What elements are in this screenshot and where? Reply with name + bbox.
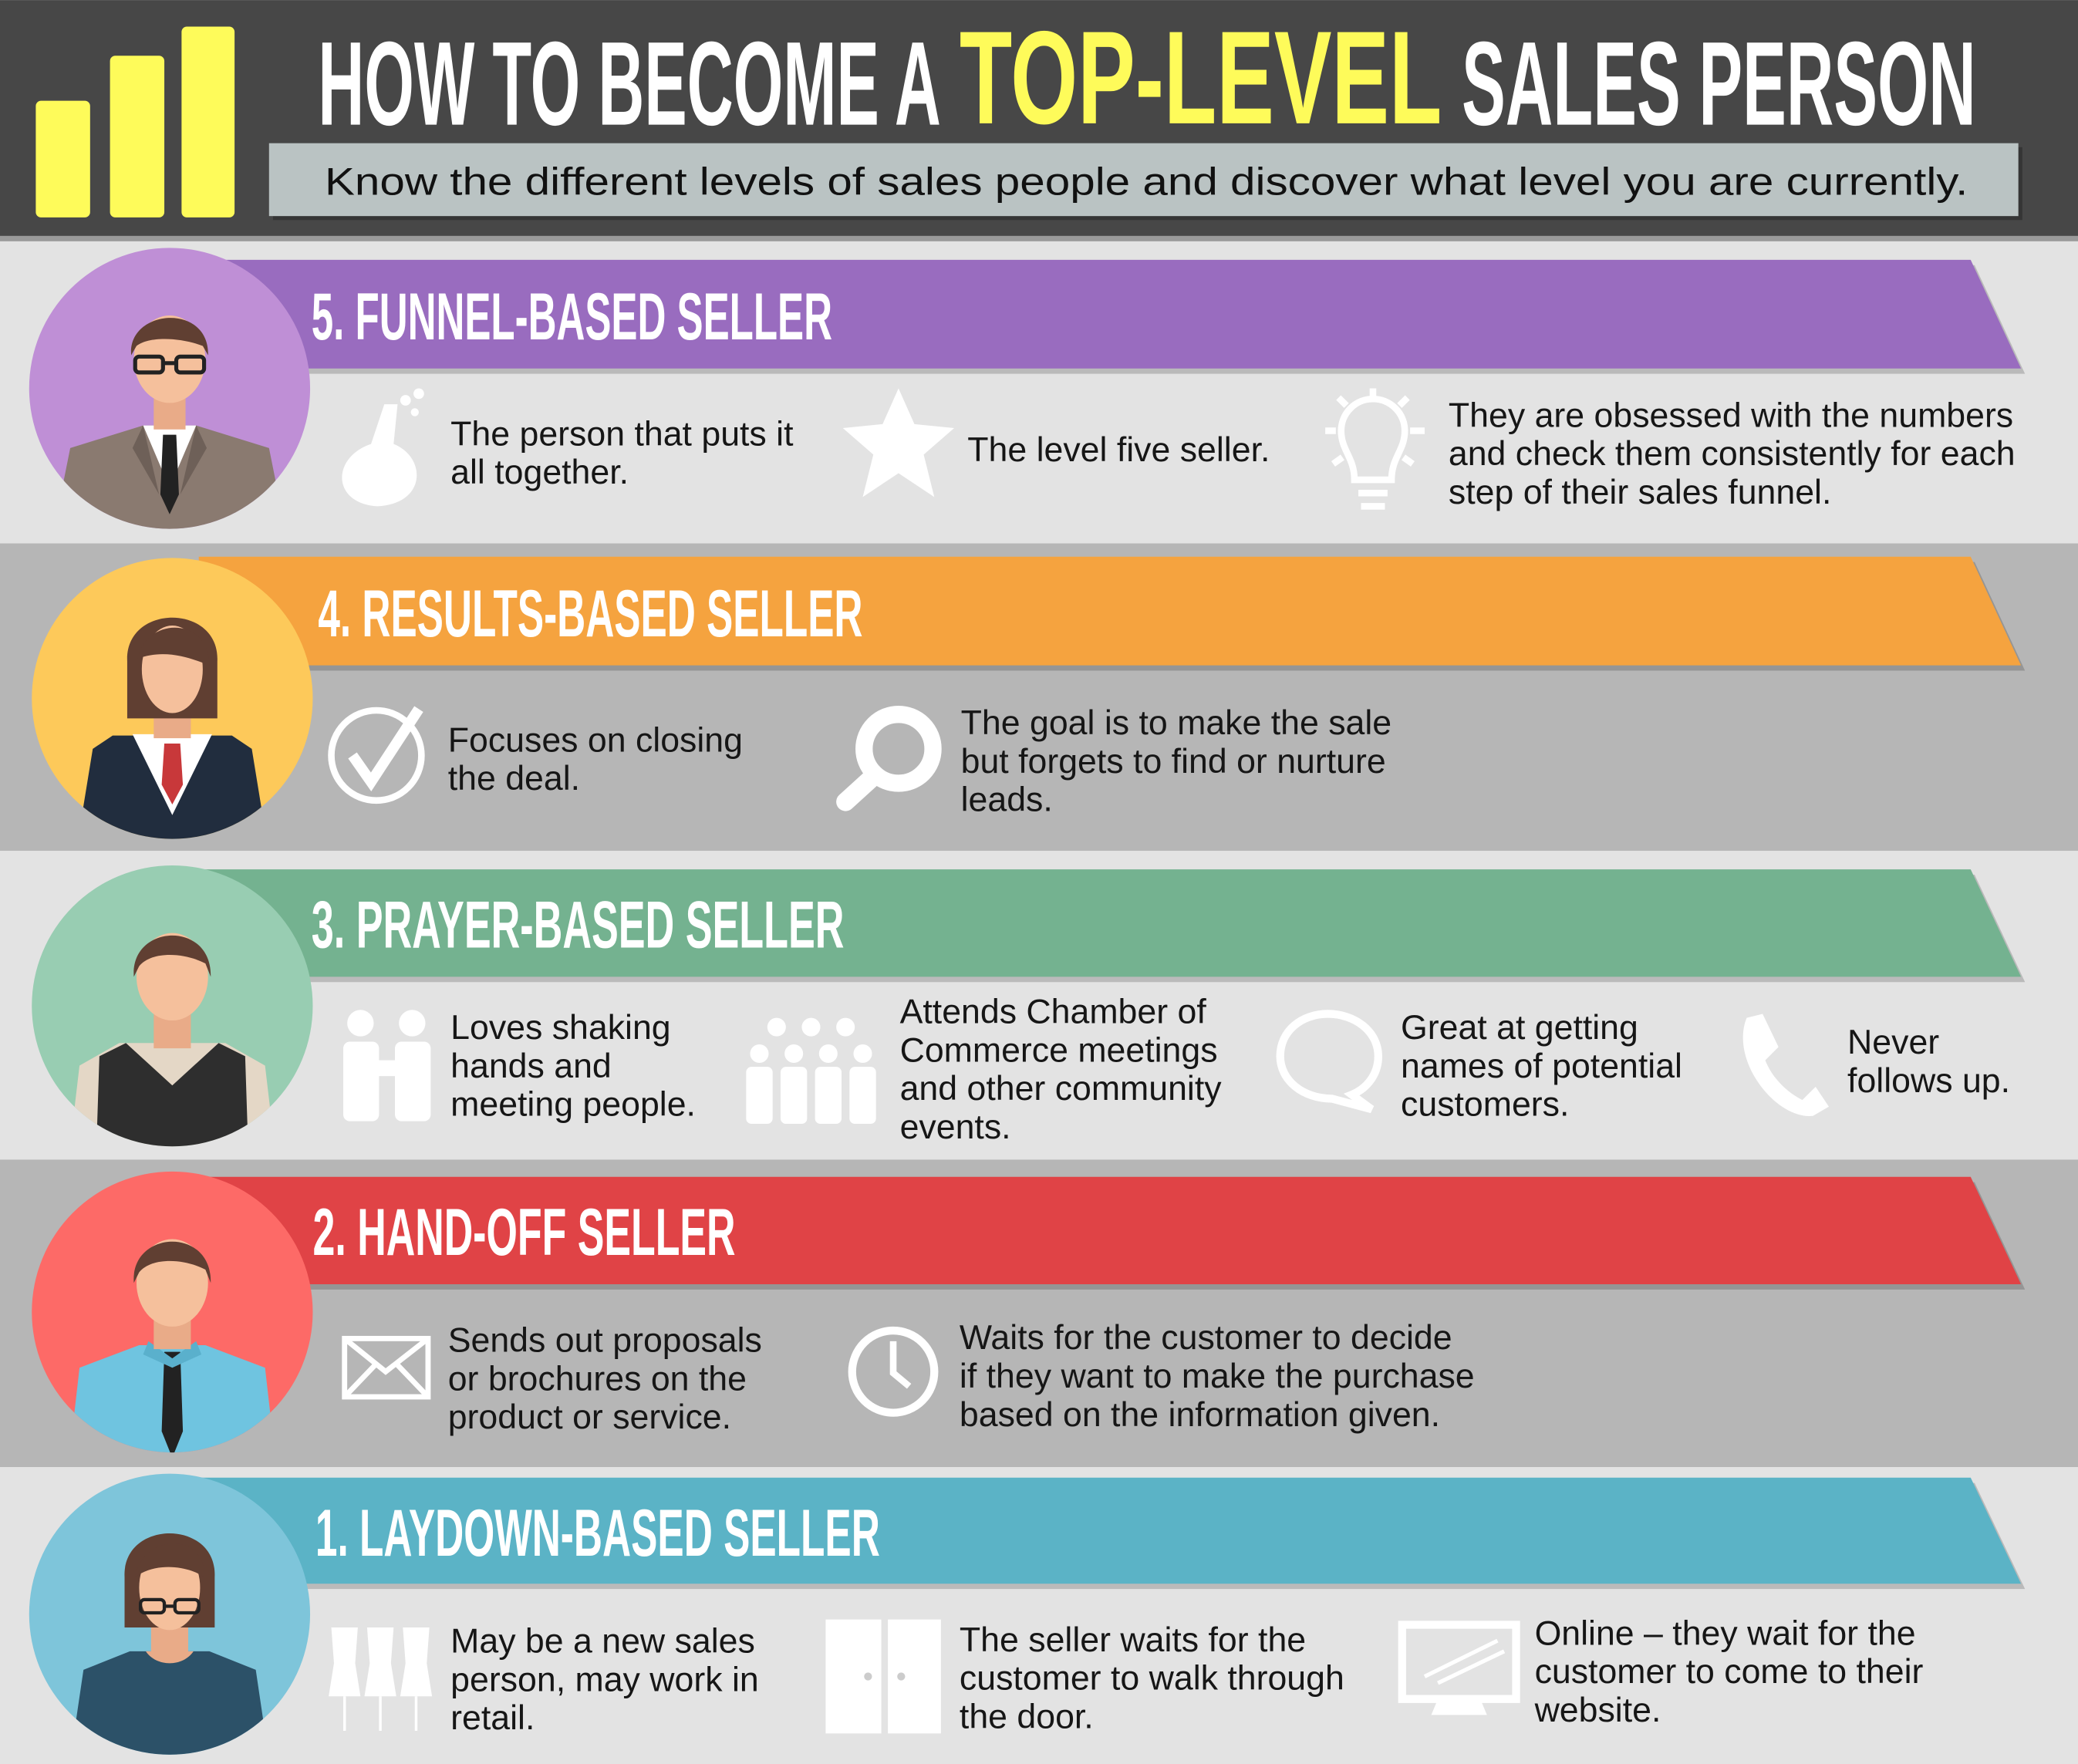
text 2a: or brochures on the (448, 1360, 747, 1398)
text 3d (1847, 1024, 2010, 1100)
text 1c: customer to come to their (1535, 1653, 1924, 1691)
text 5a: The person that puts it (450, 415, 794, 453)
banner 4 (199, 557, 2025, 670)
banner 4: 4. RESULTS-BASED SELLER (318, 577, 862, 651)
text 1c: website. (1534, 1691, 1661, 1729)
text 4a (448, 721, 743, 798)
avatar 3 (32, 865, 313, 1146)
text 2a: Sends out proposals (448, 1322, 762, 1360)
banner 2: 2. HAND-OFF SELLER (312, 1196, 736, 1270)
panel: level 3 (32, 865, 2026, 1146)
text 3b: Commerce meetings (900, 1031, 1218, 1069)
text 3b: and other community (900, 1070, 1222, 1108)
text 5c: They are obsessed with the numbers (1449, 396, 2013, 434)
text 3c: names of potential (1401, 1047, 1682, 1085)
title: TOP-LEVEL (960, 4, 1442, 152)
text 4b (961, 704, 1392, 819)
banner 3: 3. PRAYER-BASED SELLER (312, 889, 844, 963)
text 3a: Loves shaking (450, 1009, 671, 1047)
text 3d: follows up. (1847, 1062, 2010, 1100)
title (318, 4, 1976, 152)
text 1c: Online – they wait for the (1535, 1614, 1916, 1652)
banner 1: 1. LAYDOWN-BASED SELLER (315, 1496, 880, 1570)
banner 5 (199, 260, 2025, 374)
subtitle box: Know the different levels of sales people and discover what level you are currently. (325, 160, 1968, 204)
text 1a: May be a new sales (450, 1623, 755, 1661)
text 1b: the door. (960, 1698, 1094, 1736)
text 3b (900, 993, 1222, 1146)
text 3a: hands and (450, 1047, 612, 1085)
icon: door (825, 1620, 941, 1733)
text 4a: the deal. (448, 760, 580, 798)
text 5c: step of their sales funnel. (1449, 474, 1831, 511)
text 4b: but forgets to find or nurture (961, 743, 1386, 781)
icon: clock (852, 1331, 934, 1413)
title: HOW TO BECOME A (318, 17, 941, 150)
icon: check (332, 709, 421, 801)
text 5b: The level five seller. (967, 431, 1270, 469)
text 3a: meeting people. (450, 1086, 696, 1124)
text 3c: customers. (1401, 1086, 1569, 1124)
avatar 1 (29, 1474, 310, 1764)
text 5a (450, 415, 794, 491)
icon: bar chart (35, 26, 234, 218)
text 3c: Great at getting (1401, 1009, 1638, 1047)
text 3a (450, 1009, 696, 1124)
text 2b: Waits for the customer to decide (960, 1319, 1452, 1357)
icon: magnifier (845, 714, 933, 802)
icon: bulb (1325, 389, 1425, 506)
avatar 2 (32, 1172, 312, 1484)
subtitle box (269, 143, 2022, 220)
icon: flask (342, 389, 424, 506)
icon: mannequins (329, 1627, 432, 1731)
panel: level 2 (32, 1172, 2025, 1484)
text 4b: The goal is to make the sale (961, 704, 1392, 742)
avatar 5 (29, 248, 310, 548)
banner 1 (199, 1478, 2025, 1589)
text 1a: person, may work in (450, 1661, 759, 1698)
text 1b: customer to walk through (960, 1660, 1344, 1698)
banner 5: 5. FUNNEL-BASED SELLER (312, 280, 832, 354)
banner 2 (199, 1177, 2025, 1290)
icon: crowd (746, 1018, 876, 1124)
text 3b: Attends Chamber of (900, 993, 1206, 1030)
text 1a: retail. (450, 1699, 535, 1737)
text 2a: product or service. (448, 1398, 731, 1436)
text 1a (450, 1623, 759, 1737)
text 3b: events. (900, 1108, 1011, 1146)
icon: speech bubble (1280, 1014, 1378, 1109)
text 2a (448, 1322, 762, 1436)
panel: level 4 (32, 557, 2025, 871)
text 2b: based on the information given. (960, 1396, 1440, 1434)
text 3d: Never (1847, 1024, 1939, 1061)
panel: level 5 (29, 248, 2025, 548)
text 1c (1534, 1614, 1924, 1729)
text 2b: if they want to make the purchase (960, 1358, 1475, 1395)
text 5c (1449, 396, 2016, 511)
text 1b (960, 1621, 1344, 1736)
panel: level 1 (29, 1474, 2025, 1764)
text 1b: The seller waits for the (960, 1621, 1306, 1659)
icon: handshake people (343, 1010, 430, 1121)
text 2b (960, 1319, 1475, 1434)
text 3c (1401, 1009, 1682, 1124)
text 5a: all together. (450, 454, 629, 491)
text 4b: leads. (961, 781, 1053, 819)
text 5c: and check them consistently for each (1449, 435, 2016, 473)
text 4a: Focuses on closing (448, 721, 743, 759)
icon: star (843, 389, 954, 497)
icon: monitor (1402, 1625, 1516, 1715)
icon: envelope (345, 1338, 428, 1397)
avatar 4 (32, 558, 312, 871)
header (0, 0, 2078, 241)
banner 3 (199, 869, 2025, 982)
icon: phone (1743, 1014, 1829, 1116)
